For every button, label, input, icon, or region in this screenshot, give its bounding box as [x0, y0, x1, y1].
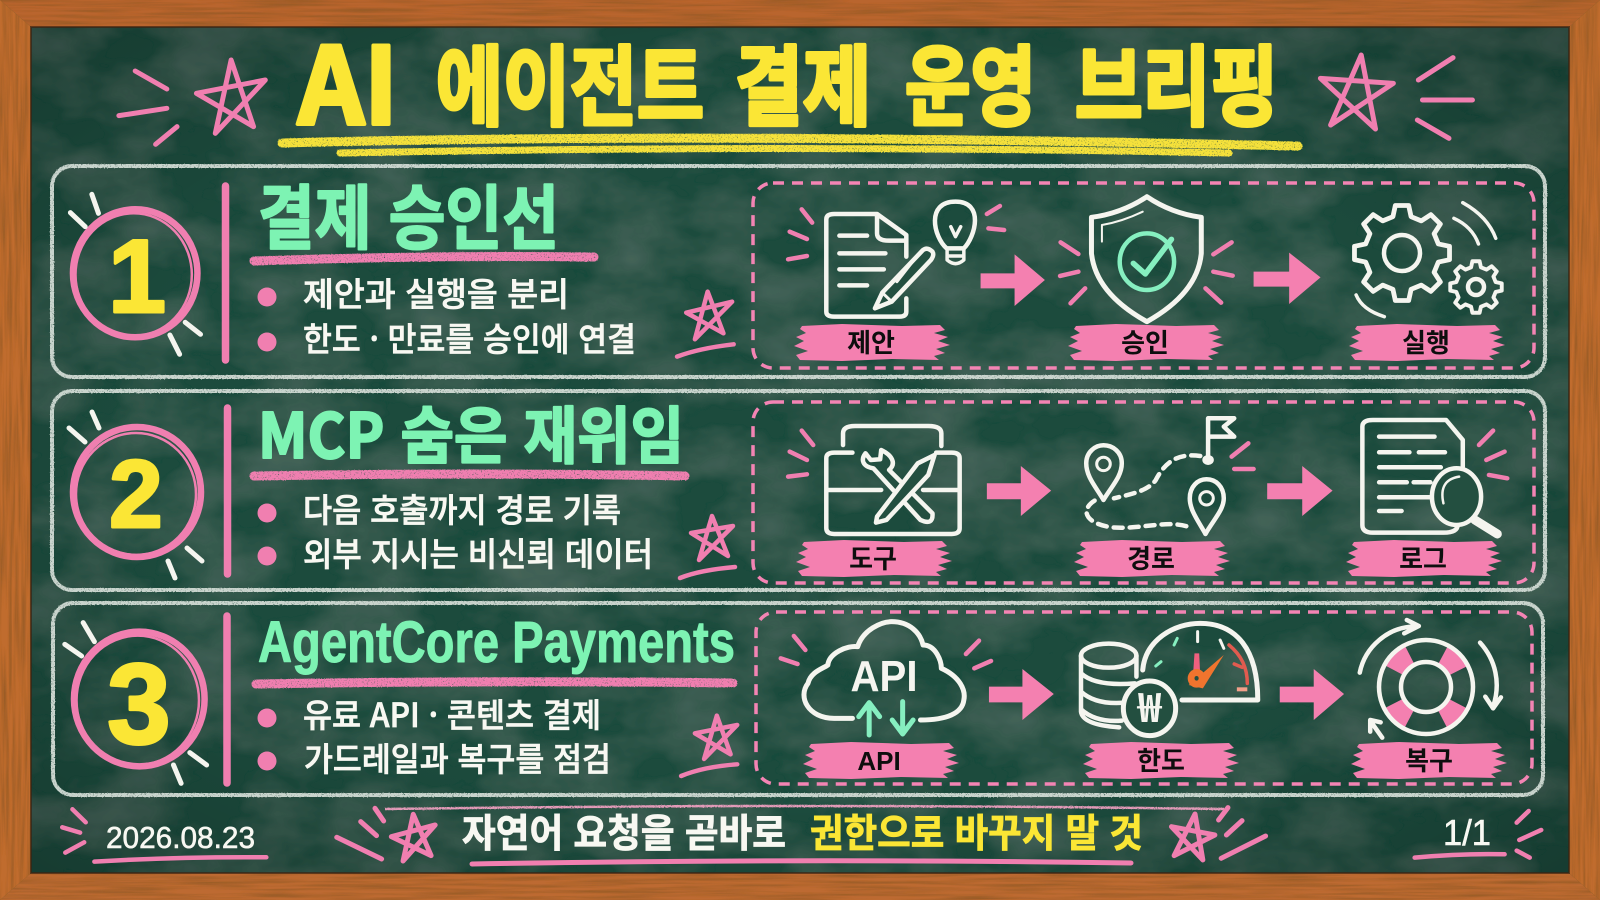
icon: arcs around gears [1356, 203, 1496, 317]
label: 한도 [1083, 741, 1239, 779]
page number [1415, 811, 1541, 858]
footer message: 자연어 요청을 곧바로 [462, 803, 786, 859]
panel: 결제 승인선 [52, 163, 1545, 377]
page number: 1/1 [1443, 812, 1491, 853]
icon: coins and gauge [1081, 623, 1258, 736]
bullet list: 제안과 실행을 분리 [303, 268, 569, 316]
icon: small star [681, 716, 737, 776]
label: 도구 [796, 539, 952, 577]
icon: shield with check [1060, 197, 1233, 322]
icon: title star right [1320, 55, 1472, 138]
divider bar [224, 408, 231, 574]
footer date: 2026.08.23 [106, 820, 255, 855]
text: API in cloud: API [850, 652, 918, 701]
arrow [1254, 253, 1321, 304]
flow icons [788, 418, 1507, 534]
label: 제안: 제안 [847, 323, 895, 360]
main title: AI [297, 1, 398, 155]
main title: 에이전트 [436, 18, 704, 144]
icon: toolbox [788, 426, 960, 534]
arrow [1267, 466, 1333, 516]
flow icons [788, 197, 1496, 322]
label: 제안 [794, 323, 950, 361]
icon: cloud outline [781, 622, 991, 735]
label: 복구: 복구 [1405, 741, 1453, 778]
bullet list: 한도 · 만료를 승인에 연결 [303, 313, 636, 361]
badge number 3 [65, 623, 207, 783]
label: 도구: 도구 [849, 539, 897, 576]
main title: 브리핑 [1075, 18, 1278, 144]
heading underline [256, 682, 733, 684]
panel: AgentCore Payments [53, 603, 1543, 795]
bullet list [258, 689, 611, 781]
label: 복구 [1351, 741, 1507, 779]
bullet list [258, 484, 653, 576]
icon: lifebuoy [1379, 640, 1473, 734]
title underline [282, 138, 1298, 153]
badge number 1 [70, 194, 201, 354]
icon: small star [680, 516, 735, 578]
label: 승인: 승인 [1121, 323, 1169, 360]
label: 실행: 실행 [1402, 323, 1450, 360]
badge number 2 [69, 412, 202, 578]
bullet list: 외부 지시는 비신뢰 데이터 [303, 528, 653, 576]
heading: AgentCore Payments [258, 610, 735, 675]
arrow [987, 466, 1051, 516]
label: 실행 [1349, 323, 1505, 361]
footer message: 권한으로 바꾸지 말 것 [810, 803, 1143, 859]
main title: 결제 [735, 18, 871, 144]
arrow [981, 254, 1045, 306]
heading underline [254, 256, 594, 261]
main title [297, 1, 1278, 155]
heading: MCP 숨은 재위임 [258, 386, 684, 476]
label: 경로: 경로 [1127, 539, 1175, 576]
icon: document with pencil and bulb [788, 202, 1004, 317]
bullet list: 다음 호출까지 경로 기록 [303, 484, 621, 532]
label: API [803, 742, 959, 779]
flow icons [781, 620, 1501, 738]
badge number 1: 1 [108, 219, 166, 335]
flow box [756, 612, 1532, 784]
icon: footer star right [1171, 808, 1266, 860]
icon: title star left [119, 60, 265, 144]
text: won symbol: ₩ [1137, 676, 1163, 734]
footer message [385, 803, 1224, 864]
label: 경로 [1074, 539, 1230, 577]
divider bar [222, 186, 229, 360]
icon: footer star left [337, 808, 435, 861]
panel: MCP 숨은 재위임 [52, 386, 1545, 590]
divider bar [223, 616, 231, 783]
bullet list: 가드레일과 복구를 점검 [304, 733, 611, 781]
icon: log with magnifier [1362, 420, 1507, 534]
flow box [753, 183, 1534, 368]
label: 한도: 한도 [1137, 741, 1185, 778]
icon: recovery arrows [1360, 620, 1501, 738]
footer date [62, 809, 266, 862]
flow box [753, 402, 1534, 583]
bullet list: 유료 API · 콘텐츠 결제 [303, 689, 601, 737]
badge number 2: 2 [109, 441, 163, 548]
label: API: API [857, 746, 901, 776]
bullet list [258, 268, 636, 361]
label: 로그 [1346, 539, 1502, 577]
main title: 운영 [905, 18, 1036, 144]
label: 로그: 로그 [1399, 539, 1447, 576]
icon: small star [677, 292, 734, 357]
heading underline [254, 474, 685, 476]
heading: 결제 승인선 [258, 163, 559, 264]
badge number 3: 3 [107, 641, 171, 768]
icon: gears [1354, 205, 1502, 313]
icon: route map [1086, 418, 1254, 534]
label: 승인 [1068, 323, 1224, 361]
arrow [1280, 669, 1344, 720]
arrow [989, 669, 1054, 720]
